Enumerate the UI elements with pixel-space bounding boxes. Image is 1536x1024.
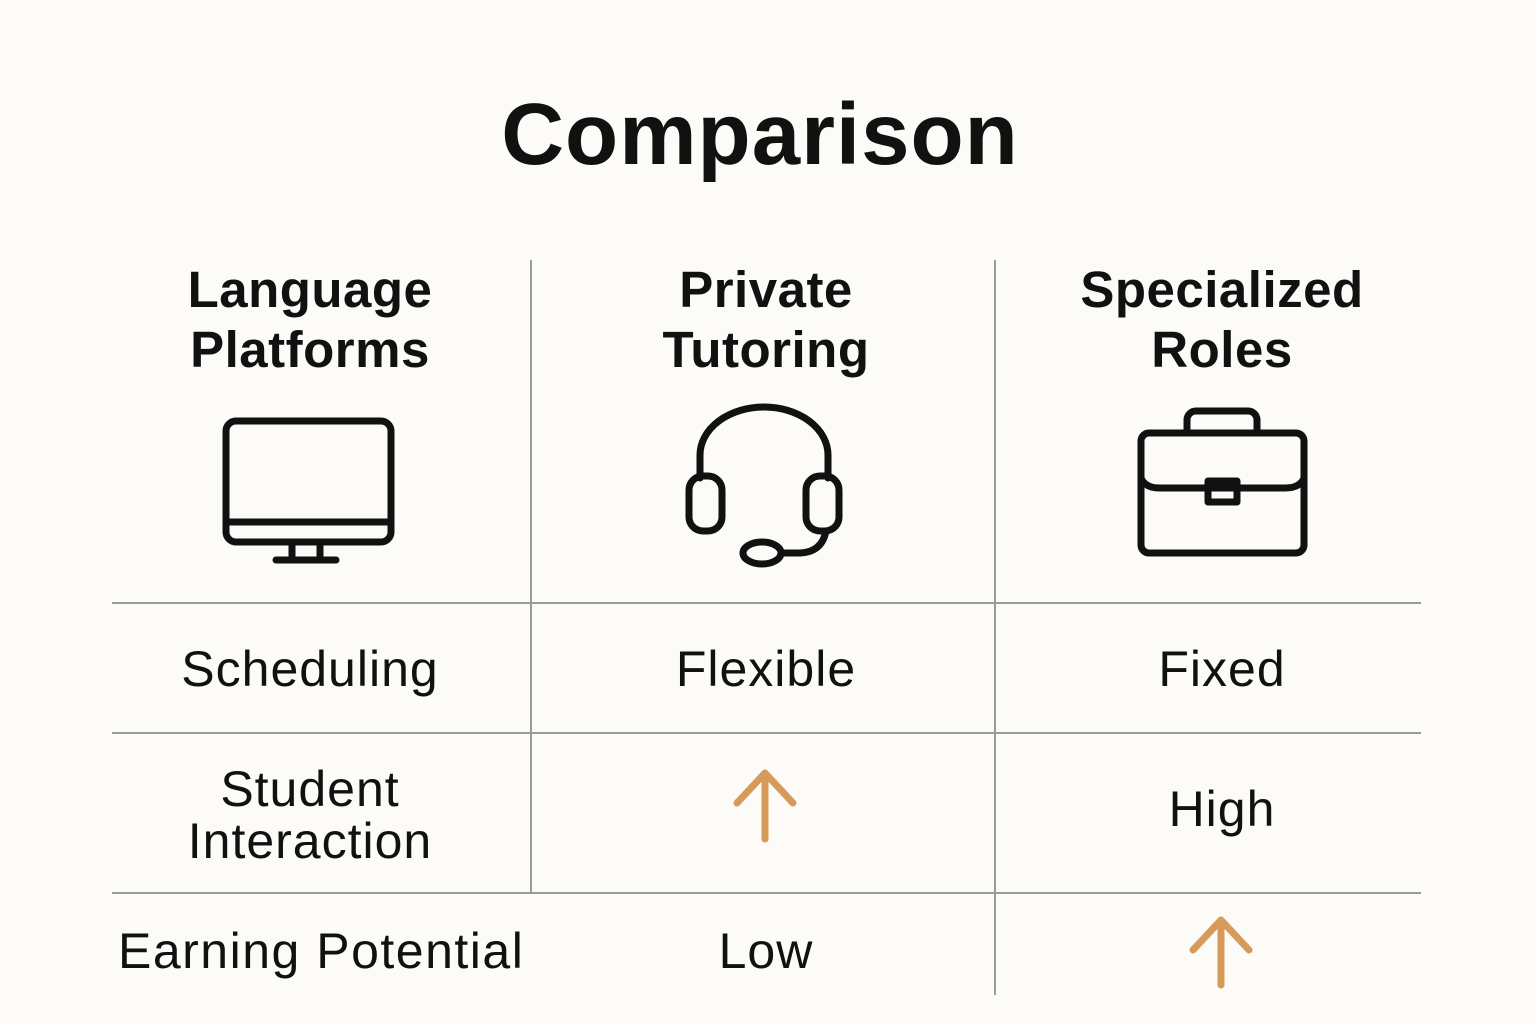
row 1: Scheduling label: Scheduling (181, 641, 439, 697)
header: Specialized Roles: Specialized (1080, 261, 1364, 318)
header: Language Platforms (188, 261, 432, 378)
row 3: Earning Potential label: Earning Potential (118, 923, 524, 979)
header: Private Tutoring: Private (679, 261, 853, 318)
row 2: Student Interaction label (188, 761, 432, 869)
row 2: High: High (1169, 781, 1275, 837)
header: Specialized Roles (1080, 261, 1364, 378)
title: Comparison (501, 86, 1019, 183)
header: Language Platforms: Platforms (190, 321, 430, 378)
row 3: Low: Low (719, 923, 813, 979)
header: Language Platforms: Language (188, 261, 432, 318)
row 2: Student Interaction label: Student (220, 761, 400, 817)
header: Private Tutoring: Tutoring (662, 321, 869, 378)
header: Private Tutoring (662, 261, 869, 378)
row 1: Flexible: Flexible (676, 641, 856, 697)
row 2: Student Interaction label: Interaction (188, 813, 432, 869)
header: Specialized Roles: Roles (1151, 321, 1293, 378)
row 1: Fixed: Fixed (1158, 641, 1286, 697)
